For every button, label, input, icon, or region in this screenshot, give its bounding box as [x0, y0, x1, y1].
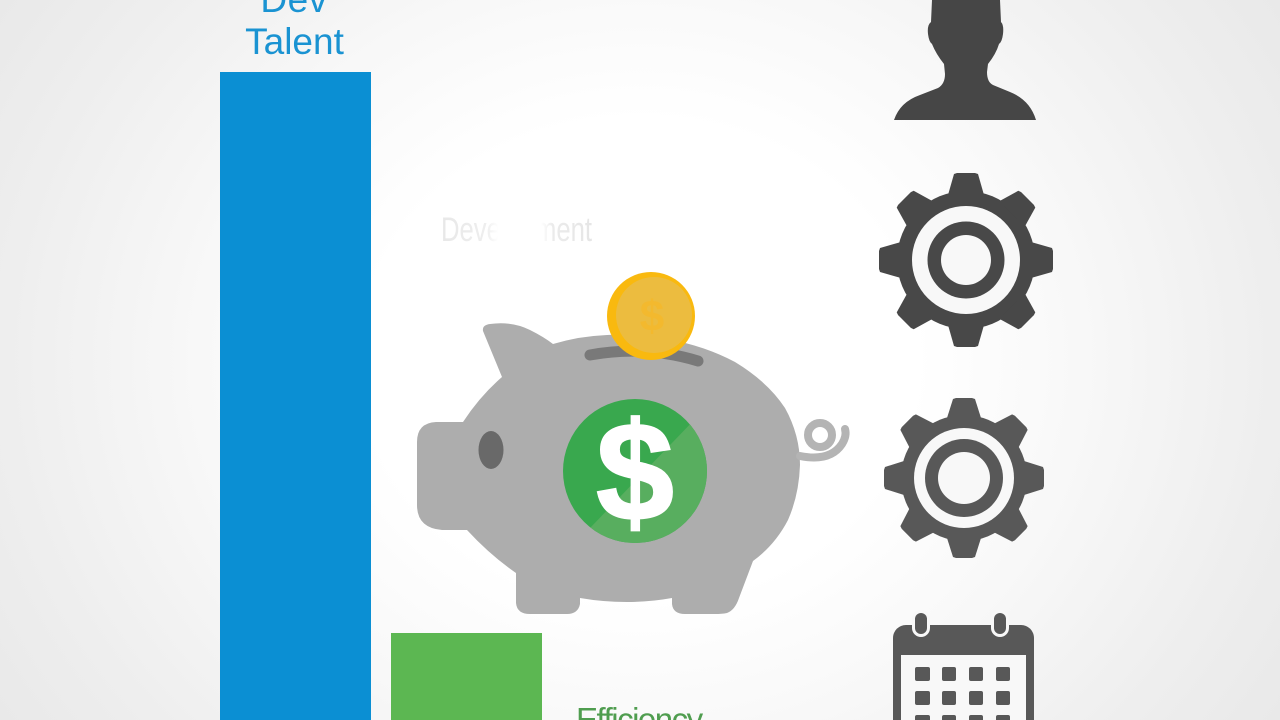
icon: person silhouette: [894, 0, 1036, 120]
icon: calendar: [893, 610, 1034, 720]
pig tail: [800, 423, 846, 458]
heading: Dev Talent: Talent: [245, 21, 345, 62]
faded label: Development: Development: [441, 211, 592, 249]
pig body: [417, 323, 800, 614]
pig eye: [478, 431, 504, 469]
gold coin: $: [640, 292, 664, 341]
heading: Dev Talent: [245, 0, 345, 62]
coin slot: [590, 351, 698, 361]
gold coin: [607, 272, 695, 360]
dollar medallion: $: [596, 393, 674, 550]
icon: piggy bank: [417, 272, 846, 614]
bar: efficiency: [391, 633, 542, 720]
icon: small gear: [884, 398, 1044, 558]
dollar medallion: [563, 399, 707, 543]
bar: dev talent: [220, 72, 371, 720]
panel: dev talent column: [220, 0, 371, 720]
icon: large gear: [879, 173, 1053, 347]
